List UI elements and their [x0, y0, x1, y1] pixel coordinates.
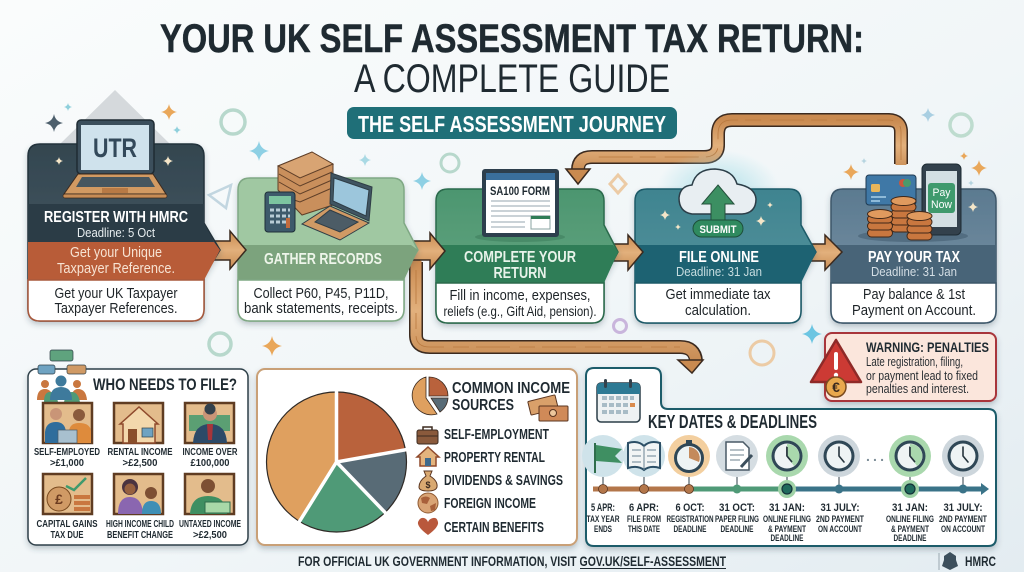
badge: submit: [693, 220, 743, 237]
icon: money bag: $: [425, 480, 431, 490]
milestone: next second payment on account: 2ND PAYMENT: [939, 514, 987, 524]
icon: warning triangle with euro coin: €: [832, 379, 840, 395]
milestone: tax year ends: TAX YEAR: [586, 514, 620, 524]
heading: pay your tax: PAY YOUR TAX: [868, 249, 960, 266]
milestone: second payment on account: 2ND PAYMENT: [816, 514, 864, 524]
heading: key dates and deadlines: KEY DATES & DEADLINES: [648, 411, 817, 432]
body text: [54, 285, 178, 317]
body text: [666, 286, 771, 319]
label: income over 100,000: £100,000: [190, 457, 230, 469]
title: A COMPLETE GUIDE: [354, 57, 670, 101]
heading: complete your return: RETURN: [494, 265, 546, 282]
milestone: registration deadline: DEADLINE: [674, 524, 706, 534]
milestone: registration deadline: 6 OCT:: [676, 502, 704, 514]
tile: high income child benefit: [114, 474, 163, 514]
heading badge: the self assessment journey: THE SELF ASSESSMENT JOURNEY: [358, 111, 666, 137]
label: capital gains: CAPITAL GAINS: [36, 518, 98, 530]
milestone: paper filing deadline: [715, 435, 759, 534]
icon: SA100 form: SA100 FORM: [490, 184, 550, 198]
heading: file online: FILE ONLINE: [679, 249, 759, 266]
body text: [444, 287, 596, 319]
milestone: paper filing deadline: DEADLINE: [720, 524, 754, 534]
deadline: 31 Jan: Deadline: 31 Jan: [871, 264, 957, 279]
decorative sparkles and rings: [45, 90, 987, 365]
label: high income child benefit: BENEFIT CHANGE: [107, 529, 173, 541]
tile: capital gains: £: [55, 491, 63, 507]
label: dividends and savings: DIVIDENDS & SAVINGS: [444, 473, 563, 489]
warning text: penalties and interest.: [866, 382, 969, 396]
heading badge: the self assessment journey: [347, 107, 677, 139]
warning text: [866, 355, 978, 396]
icon: cloud upload: [679, 169, 756, 224]
icon: phone with pay now: Pay: [932, 187, 951, 199]
body text: Fill in income, expenses,: [450, 287, 590, 304]
icon: payment card: [866, 175, 916, 205]
panel: gather records: [238, 152, 418, 321]
label: income over 100,000: INCOME OVER: [182, 446, 238, 458]
title: YOUR UK SELF ASSESSMENT TAX RETURN:: [160, 17, 864, 61]
icon: globe: [418, 493, 438, 513]
milestone: next online filing and payment deadline: ONLINE FILING: [886, 514, 934, 524]
title: [160, 17, 864, 101]
milestone: online filing and payment deadline: 31 JAN:: [769, 502, 805, 514]
panel: key dates and deadlines: [582, 368, 996, 546]
icon: calculator: [265, 192, 295, 232]
orange band text: Get your Unique: [70, 244, 162, 261]
icon: warning triangle with euro coin: [811, 340, 861, 397]
body text: Get immediate tax: [666, 286, 771, 303]
label: rental income: RENTAL INCOME: [108, 446, 172, 458]
warning text: or payment lead to fixed: [866, 369, 978, 383]
pie chart: [266, 390, 407, 532]
arrow: branch to key dates: [416, 260, 703, 373]
label: income over 100,000: [182, 446, 238, 469]
heading: who needs to file: WHO NEEDS TO FILE?: [93, 375, 237, 394]
milestone: tax year ends: 5 APR:: [591, 502, 615, 514]
body text: Payment on Account.: [852, 302, 976, 319]
tile: untaxed income: [185, 474, 234, 514]
milestone: next second payment on account: 31 JULY:: [944, 502, 982, 514]
body text: [852, 286, 976, 319]
milestone: registration deadline: [666, 435, 714, 534]
panel: file online: [635, 150, 816, 323]
orange band text: [57, 244, 175, 277]
tile: capital gains: [43, 474, 92, 514]
tile: income over 100,000: [185, 403, 234, 443]
icon: small pie: [412, 377, 448, 415]
timeline: [593, 477, 989, 498]
ellipsis: ...: [866, 448, 884, 464]
milestone: online filing and payment deadline: ONLINE FILING: [763, 514, 811, 524]
HMRC logo: HMRC: [965, 554, 996, 569]
label: rental income: >£2,500: [122, 457, 158, 469]
milestone: tax year ends: ENDS: [594, 524, 612, 534]
milestone: next second payment on account: ON ACCOUNT: [941, 524, 985, 534]
milestone: paper filing deadline: PAPER FILING: [715, 514, 759, 524]
heading: complete your return: [464, 249, 576, 282]
icon: phone with pay now: [922, 164, 961, 235]
warning heading: WARNING: PENALTIES: [866, 339, 989, 355]
icon: money bag: [419, 471, 437, 491]
milestone: online filing and payment deadline: DEADLINE: [770, 533, 804, 543]
milestone: next online filing and payment deadline: [886, 435, 934, 543]
body text: Pay balance & 1st: [863, 286, 966, 303]
arrow: gather to complete: [410, 233, 445, 269]
orange band text: Taxpayer Reference.: [57, 260, 175, 277]
milestone: file from this date: 6 APR:: [629, 502, 659, 514]
icon: SA100 form: [482, 169, 559, 237]
callout: warning penalties: [811, 333, 996, 401]
body text: Taxpayer References.: [54, 300, 178, 317]
milestone: second payment on account: 31 JULY:: [820, 502, 860, 514]
milestone: paper filing deadline: 31 OCT:: [719, 502, 755, 514]
heading: complete your return: COMPLETE YOUR: [464, 249, 576, 266]
icon: laptop showing UTR: [63, 120, 167, 198]
icon: house: [417, 447, 439, 466]
milestone: online filing and payment deadline: & PAYMENT: [768, 524, 806, 534]
milestone: next second payment on account: [939, 435, 987, 534]
body text: calculation.: [685, 302, 751, 319]
body text: reliefs (e.g., Gift Aid, pension).: [444, 303, 596, 319]
label: high income child benefit: [106, 518, 174, 541]
tile: rental income: [114, 403, 163, 443]
icon: coin stacks: [868, 196, 932, 240]
badge: submit: SUBMIT: [700, 224, 737, 236]
footer link text: FOR OFFICIAL UK GOVERNMENT INFORMATION, VISIT GOV.UK/SELF-ASSESSMENT: [298, 554, 727, 569]
panel: register with HMRC: [28, 120, 220, 321]
body text: bank statements, receipts.: [244, 300, 398, 317]
heading: common income sources: COMMON INCOME: [452, 380, 570, 397]
arrow: register to gather: [210, 231, 246, 269]
label: untaxed income: [179, 518, 241, 541]
label: rental income: [108, 446, 172, 469]
icon: stack of records: [278, 152, 333, 215]
milestone: next online filing and payment deadline: DEADLINE: [894, 533, 926, 543]
arrow: return loop from pay to complete: [566, 120, 901, 184]
icon: briefcase: [417, 427, 438, 444]
label: untaxed income: >£2,500: [193, 529, 227, 541]
heading: common income sources: [452, 380, 570, 414]
milestone: file from this date: [623, 435, 665, 534]
milestone: second payment on account: [816, 435, 864, 534]
milestone: online filing and payment deadline: [763, 435, 811, 543]
body text: [244, 285, 398, 317]
icon: phone with pay now: Now: [931, 199, 952, 211]
milestone: registration deadline: REGISTRATION: [666, 514, 714, 524]
label: untaxed income: UNTAXED INCOME: [179, 518, 241, 530]
label: self-employment: SELF-EMPLOYMENT: [444, 427, 549, 443]
milestone: file from this date: FILE FROM: [627, 514, 661, 524]
deadline: 5 Oct: Deadline: 5 Oct: [77, 225, 155, 240]
milestone: next online filing and payment deadline: & PAYMENT: [891, 524, 929, 534]
panel: complete your return: [436, 169, 618, 323]
heading: gather records: GATHER RECORDS: [264, 251, 382, 268]
HMRC logo: [939, 552, 996, 570]
panel: common income sources: [257, 369, 577, 545]
label: self-employed: [34, 446, 100, 469]
label: foreign income: FOREIGN INCOME: [444, 496, 536, 512]
icon: banknotes: [528, 395, 568, 421]
heading: register with HMRC: REGISTER WITH HMRC: [44, 209, 188, 226]
icon: heart: [418, 518, 438, 535]
panel: who needs to file: [28, 350, 248, 545]
icon: group of people with speech bubbles: [37, 350, 87, 402]
panel: pay your tax: [831, 164, 996, 323]
heading: common income sources: SOURCES: [452, 397, 514, 414]
label: property rental: PROPERTY RENTAL: [444, 450, 545, 466]
milestone: second payment on account: ON ACCOUNT: [818, 524, 862, 534]
milestone: next online filing and payment deadline: 31 JAN:: [892, 502, 928, 514]
icon: laptop: [302, 173, 372, 240]
body text: Get your UK Taxpayer: [54, 285, 178, 302]
body text: Collect P60, P45, P11D,: [254, 285, 388, 302]
tile: self-employed: [43, 403, 92, 443]
icon: calendar: [597, 379, 640, 422]
warning text: Late registration, filing,: [866, 355, 963, 369]
arrow: complete to file: [610, 235, 643, 270]
label: self-employed: >£1,000: [50, 457, 84, 469]
label: high income child benefit: HIGH INCOME CHILD: [106, 518, 174, 530]
label: capital gains: [36, 518, 98, 541]
label: capital gains: TAX DUE: [50, 529, 84, 541]
label: self-employed: SELF-EMPLOYED: [34, 446, 100, 458]
milestone: tax year ends: [582, 435, 624, 534]
label: certain benefits: CERTAIN BENEFITS: [444, 520, 544, 536]
icon: laptop showing UTR: UTR: [93, 133, 137, 163]
arrow: file to pay: [806, 235, 842, 270]
deadline: 31 Jan: Deadline: 31 Jan: [676, 264, 762, 279]
milestone: file from this date: THIS DATE: [628, 524, 660, 534]
